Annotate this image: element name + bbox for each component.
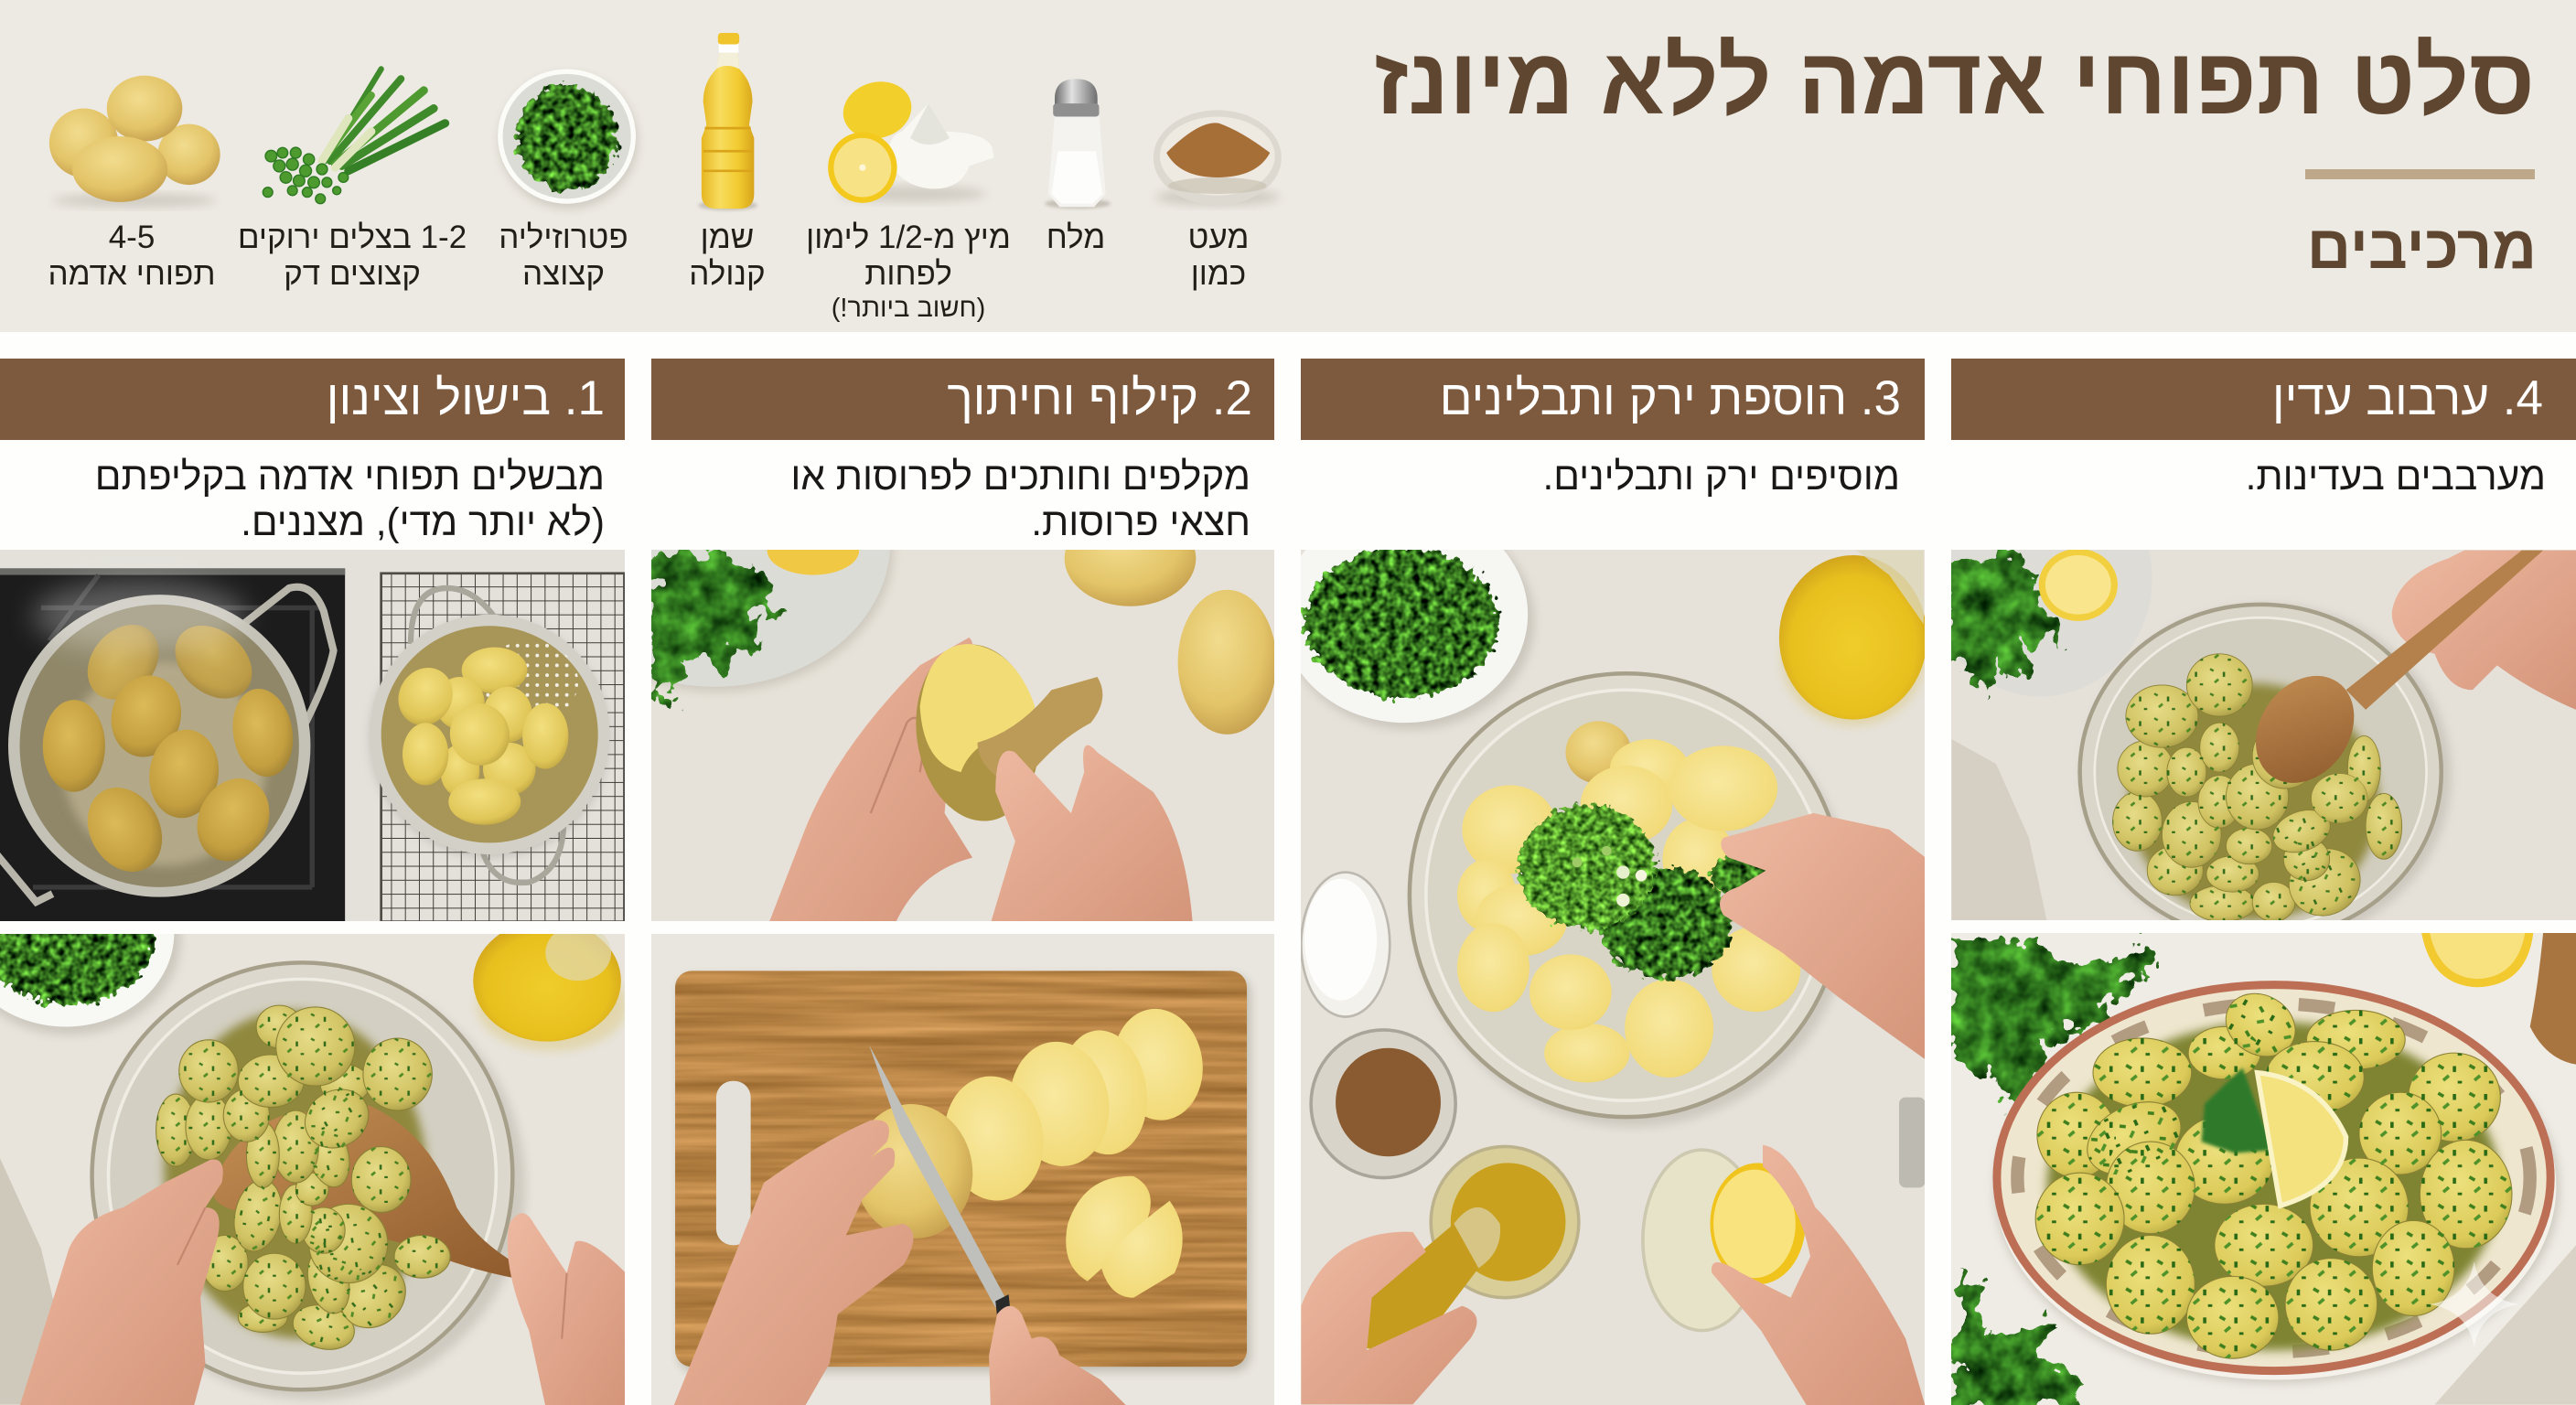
- photo: gentle mixing with wooden spoon: [1951, 550, 2576, 920]
- oil bowl: [1431, 1146, 1579, 1298]
- chopped parsley and scallions: [1518, 805, 1822, 979]
- left hand: [673, 1120, 913, 1405]
- cutting board: [675, 971, 1250, 1372]
- dressed potato slices: [156, 1005, 450, 1356]
- step 1 header: 1. בישול וצינון: [327, 371, 605, 425]
- label: parsley: קצוצה: [522, 256, 605, 292]
- hands: [20, 1160, 626, 1405]
- label: potatoes: [48, 220, 216, 292]
- lemon half: [1710, 1163, 1806, 1284]
- label: lemon juice: (חשוב ביותר!): [832, 294, 985, 323]
- oil bottle: [1357, 1207, 1500, 1356]
- panel: ingredients header band: [0, 0, 2576, 332]
- lemon slice: [2258, 1073, 2346, 1206]
- watermark star: [2430, 1261, 2518, 1347]
- label: lemon juice: [806, 220, 1011, 323]
- hand pouring oil: [1301, 1232, 1476, 1404]
- label: cumin: כמון: [1191, 256, 1246, 292]
- icon: green onions: [263, 69, 445, 204]
- photo: finished potato salad in bowl: [1951, 933, 2576, 1405]
- parsley sprig: [1952, 1273, 2089, 1405]
- label: canola oil: קנולה: [689, 256, 766, 292]
- step 4 header: [1951, 359, 2576, 440]
- label: potatoes: 4-5: [109, 220, 155, 255]
- potato being cut: [845, 1097, 982, 1246]
- step 2 description: מקלפים וחותכים לפרוסות או: [790, 455, 1250, 498]
- lemon juice bowl: [1643, 1150, 1761, 1331]
- parsley bowl: [1282, 506, 1534, 729]
- ceramic bowl: [1992, 981, 2560, 1383]
- step 2 description: חצאי פרוסות.: [1031, 500, 1250, 543]
- knife: [869, 1045, 1015, 1364]
- icon: potatoes: [49, 76, 220, 207]
- step 1 description: (לא יותר מדי), מצננים.: [241, 500, 605, 543]
- step 1 description: [95, 455, 605, 543]
- icon: parsley bowl: [498, 69, 638, 209]
- potato pile shade: [2047, 1022, 2500, 1350]
- oil jug: [1779, 551, 1927, 726]
- title: סלט תפוחי אדמה ללא מיונז: [1374, 28, 2535, 134]
- wooden spoon: [213, 1106, 528, 1280]
- colander of drained potatoes: [370, 588, 609, 883]
- label: lemon juice: מיץ מ-1/2 לימון: [806, 220, 1011, 255]
- step 4 description: מערבבים בעדינות.: [2246, 455, 2546, 498]
- label: cumin: מעט: [1188, 220, 1249, 255]
- lemon half: [2421, 933, 2533, 987]
- icon: oil bottle: [698, 33, 757, 210]
- parsley bunch: [1952, 939, 2155, 1117]
- photo: boiling and draining potatoes: [0, 550, 625, 921]
- salt bowl: [1301, 873, 1390, 1017]
- cumin bowl: [1311, 1030, 1455, 1178]
- step 3 header: [1301, 359, 1925, 440]
- ingredient illustrations: [49, 33, 1282, 212]
- cooling rack: [381, 574, 624, 922]
- label: parsley: פטרוזיליה: [499, 220, 628, 255]
- icon: lemons and juicer: [828, 74, 994, 203]
- step 4 header: 4. ערבוב עדין: [2272, 371, 2543, 425]
- towel: [2435, 1245, 2576, 1404]
- label: canola oil: שמן: [701, 220, 754, 255]
- herb bowl: [0, 840, 181, 1035]
- dressed potatoes: [2035, 981, 2512, 1358]
- dressed potatoes: [2113, 654, 2402, 928]
- potatoes in front of spoon: [2312, 774, 2367, 823]
- right hand: [991, 745, 1193, 923]
- step 1 header: [0, 359, 625, 440]
- label: lemon juice: לפחות: [864, 256, 952, 292]
- step 2 header: [651, 359, 1274, 440]
- label: parsley: [499, 220, 628, 292]
- glass bowl: [2080, 605, 2452, 946]
- heading: ingredients: מרכיבים: [2307, 213, 2537, 282]
- label: green onions: [238, 220, 467, 292]
- photo: mixing sliced potatoes in bowl with spoon: [0, 934, 625, 1405]
- step 1 description: מבשלים תפוחי אדמה בקליפתם: [95, 455, 605, 498]
- potato slices in bowl: [1457, 721, 1800, 1082]
- wooden spoon: [2236, 551, 2543, 802]
- right hand: [989, 1306, 1127, 1405]
- step 2 header: 2. קילוף וחיתוך: [947, 371, 1252, 425]
- plate with parsley and lemon: [539, 398, 894, 700]
- plate with parsley and lemon: [1928, 460, 2152, 703]
- step 3 description: מוסיפים ירק ותבלינים.: [1542, 455, 1900, 498]
- left hand: [768, 638, 973, 923]
- step 2 description: [790, 455, 1250, 543]
- hand: [2392, 551, 2576, 710]
- towel: [0, 1158, 62, 1404]
- label: potatoes: תפוחי אדמה: [48, 256, 216, 292]
- step 3 header: 3. הוספת ירק ותבלינים: [1440, 371, 1901, 425]
- potato slices: [937, 1003, 1210, 1298]
- label: canola oil: [689, 220, 766, 292]
- peeled potato: [905, 637, 1102, 829]
- icon: cumin bowl: [1154, 110, 1282, 206]
- label: cumin: [1188, 220, 1249, 292]
- loose potatoes: [1065, 511, 1276, 735]
- label: green onions: קצוצים דק: [284, 256, 421, 292]
- potato pile shade: [2130, 683, 2378, 920]
- parsley garnish: [2202, 1067, 2275, 1153]
- pepper mill: [2530, 933, 2576, 1065]
- label: green onions: 1-2 בצלים ירוקים: [238, 220, 467, 255]
- hand squeezing lemon: [1712, 1145, 1926, 1405]
- jar edge: [1899, 1098, 1926, 1187]
- stove: [0, 568, 345, 923]
- icon: salt shaker: [1045, 79, 1111, 209]
- hand sprinkling herbs: [1720, 813, 1926, 1059]
- photo: adding herbs and seasonings to bowl: [1301, 550, 1925, 1405]
- oil jar: [473, 920, 628, 1051]
- divider rule: [2305, 169, 2535, 179]
- potato pile shade: [153, 1002, 438, 1347]
- label: salt: מלח: [1046, 220, 1105, 255]
- glass bowl: [92, 962, 526, 1400]
- photo: slicing potato on cutting board: [651, 934, 1274, 1405]
- photo: peeling a potato: [651, 550, 1274, 921]
- large glass bowl: [1410, 673, 1852, 1127]
- towel: [1952, 739, 2047, 922]
- pot of boiling potatoes: [0, 580, 334, 902]
